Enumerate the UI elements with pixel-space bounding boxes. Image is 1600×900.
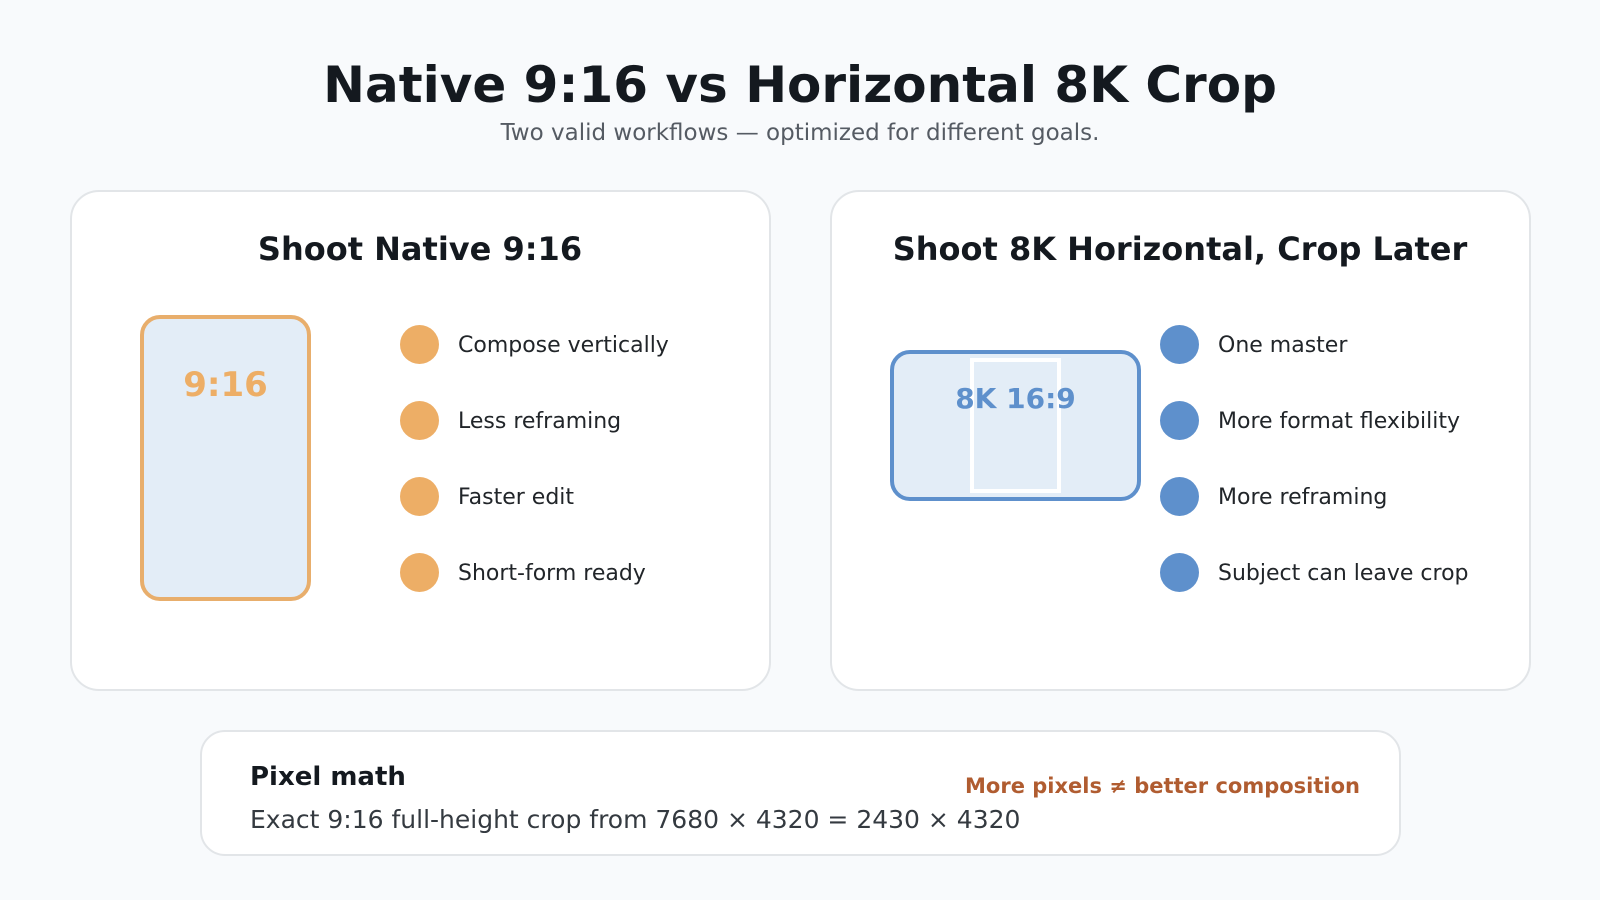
list item: more reframing [1160,477,1387,516]
list item: subject can leave crop: Subject can leave crop [1218,561,1469,586]
horizontal frame with crop [892,352,1139,499]
list item: less reframing [400,401,621,440]
panel heading: Shoot 8K Horizontal, Crop Later [893,230,1468,268]
panel: shoot 8K horizontal [831,191,1530,690]
list item: short-form ready: Short-form ready [458,561,646,586]
list item: one master: One master [1218,333,1348,358]
list item: short-form ready [400,553,646,592]
list item: more reframing: More reframing [1218,485,1387,510]
pixel math formula: Exact 9:16 full-height crop from 7680 × 4320 = 2430 × 4320 [250,805,1020,834]
panel: pixel math [201,731,1400,855]
vertical frame [142,317,309,599]
panel: shoot native 9:16 [71,191,770,690]
list item: compose vertically: Compose vertically [458,333,669,358]
list item: more format flexibility [1160,401,1460,440]
subtitle: Two valid workflows — optimized for different goals. [500,120,1099,146]
horizontal frame with crop: 8K 16:9 [955,382,1076,415]
vertical frame: 9:16 [183,365,268,405]
list item: faster edit: Faster edit [458,485,574,510]
pixel math heading: Pixel math [250,762,406,792]
list item: more format flexibility: More format flexibility [1218,409,1460,434]
list item: less reframing: Less reframing [458,409,621,434]
list item: compose vertically [400,325,669,364]
list item: faster edit [400,477,574,516]
list item: subject can leave crop [1160,553,1469,592]
callout: More pixels ≠ better composition [965,774,1360,798]
title: Native 9:16 vs Horizontal 8K Crop [323,56,1277,114]
panel heading: Shoot Native 9:16 [258,230,582,268]
list item: one master [1160,325,1348,364]
